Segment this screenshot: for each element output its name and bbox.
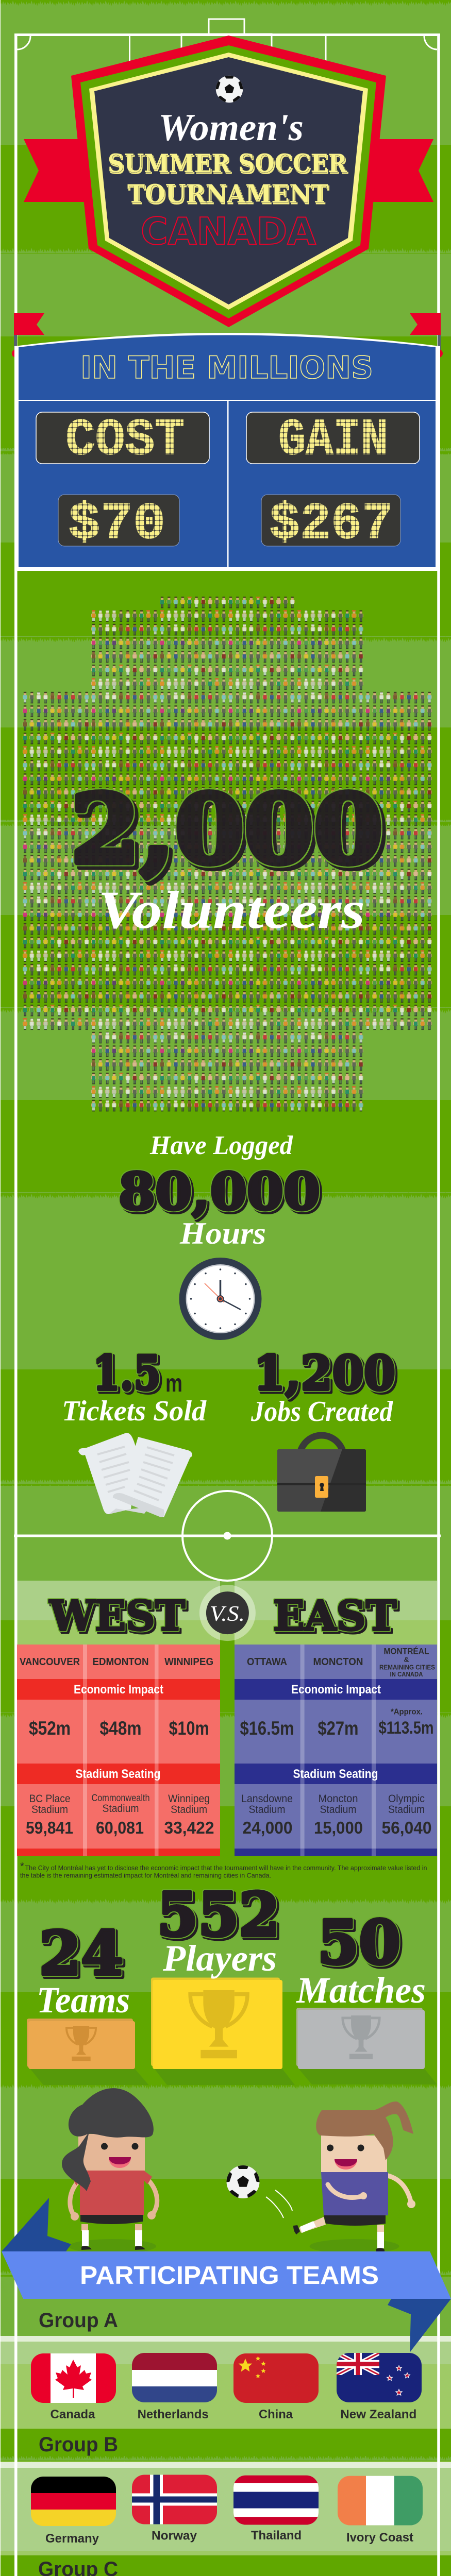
volunteers crowd: [22, 596, 433, 1113]
stat: 2,000: 2,000: [71, 774, 383, 885]
number: 1,200: 1,200: [254, 1345, 395, 1401]
economic values: *Approx.: [391, 1707, 423, 1717]
flag: thailand: [233, 2476, 319, 2525]
banner tails: [2, 2198, 451, 2352]
crowd of people: [22, 596, 433, 1113]
city names: MONCTON: [313, 1656, 363, 1668]
illustration: player two: [293, 2102, 415, 2253]
band: stadium seating: Stadium Seating: [293, 1767, 378, 1781]
label: have logged: Have Logged: [149, 1131, 293, 1160]
city names: IN CANADA: [390, 1670, 423, 1678]
podium: teams: [27, 2019, 135, 2069]
icon: clock: [179, 1258, 262, 1340]
number: 80,000: 80,000: [119, 1162, 320, 1222]
translucent group panels: [0, 2336, 451, 2576]
city names: REMAINING CITIES: [379, 1663, 435, 1671]
seat counts: 56,040: [381, 1818, 432, 1837]
label: jobs created: Jobs Created: [250, 1396, 393, 1428]
city names: WINNIPEG: [164, 1656, 213, 1668]
label: germany: Germany: [45, 2532, 99, 2546]
economic values: [29, 1718, 209, 1739]
number: 1.5m: m: [165, 1370, 182, 1397]
seat counts: [242, 1818, 432, 1837]
illustration: player one: [62, 2088, 157, 2253]
city names: OTTAWA: [247, 1656, 287, 1668]
icon: soccer ball in motion: [224, 2164, 292, 2218]
light band: [17, 1581, 437, 1645]
group a: [31, 2309, 422, 2421]
footnote: [20, 1861, 427, 1879]
flag: germany: [31, 2477, 116, 2526]
flag: canada: [31, 2353, 116, 2403]
title: Women's: Women's: [158, 107, 304, 149]
seat counts: 15,000: [314, 1818, 363, 1837]
stadium names: Stadium: [102, 1803, 139, 1815]
economic values: [240, 1707, 434, 1739]
ribbon behind badge: [24, 139, 433, 202]
seat counts: 60,081: [96, 1818, 144, 1837]
group b: [31, 2433, 423, 2546]
scoreboard: cost value: $70: [68, 496, 165, 554]
economic values: $52m: [29, 1718, 71, 1739]
panel: west vs east heading: [17, 1581, 437, 1645]
heading: group a: Group A: [39, 2309, 118, 2332]
stadium names: Olympic: [388, 1793, 425, 1805]
icon: soccer ball: [214, 75, 245, 104]
label: volunteers: Volunteers: [98, 880, 365, 940]
stadium names: [29, 1793, 210, 1816]
label: matches: Matches: [296, 1970, 426, 2011]
economic values: $48m: [100, 1718, 141, 1739]
heading: east: EAST: [273, 1591, 396, 1640]
table: west cities: [17, 1645, 220, 1856]
band: stadium seating: Stadium Seating: [75, 1767, 161, 1781]
label: new zealand: New Zealand: [340, 2408, 416, 2421]
city names: EDMONTON: [93, 1656, 148, 1668]
city names: [20, 1656, 213, 1668]
stat: tickets sold: [62, 1345, 207, 1517]
city names: [247, 1647, 435, 1678]
economic values: $113.5m: [378, 1718, 434, 1738]
corner flags: [12, 313, 443, 358]
header badge: [24, 36, 433, 327]
label: netherlands: Netherlands: [138, 2408, 209, 2421]
title: Canada: CANADA: [141, 210, 316, 253]
flag: china: [233, 2353, 319, 2403]
label: thailand: Thailand: [251, 2529, 302, 2543]
icon: tickets: [78, 1433, 192, 1517]
seat counts: 59,841: [26, 1818, 73, 1837]
label: norway: Norway: [152, 2529, 197, 2543]
stadium names: Moncton: [319, 1793, 358, 1805]
stadium names: BC Place: [29, 1793, 70, 1805]
icon: briefcase: [277, 1435, 366, 1512]
city names: &: [404, 1655, 409, 1664]
seat counts: [26, 1818, 214, 1837]
heading: participating teams: PARTICIPATING TEAMS: [80, 2262, 379, 2290]
stadium names: Stadium: [388, 1804, 425, 1816]
economic values: $27m: [318, 1718, 359, 1739]
footnote: *: [20, 1861, 24, 1872]
heading: in the millions: IN THE MILLIONS: [80, 350, 373, 386]
label: teams: Teams: [37, 1979, 130, 2021]
badge: v.s.: V.S.: [210, 1602, 245, 1626]
stadium names: Stadium: [171, 1804, 207, 1816]
stat: jobs created: [250, 1345, 395, 1512]
stadium names: Stadium: [320, 1804, 357, 1816]
footnote: the table is the remaining estimated impact for Montréal and remaining cities in Canada.: [20, 1872, 271, 1879]
label: china: China: [259, 2408, 293, 2421]
heading: west: WEST: [49, 1591, 185, 1640]
label: hours: Hours: [179, 1216, 266, 1250]
number: 552: 552: [157, 1880, 280, 1950]
title: Summer Soccer: SUMMER SOCCER: [108, 148, 347, 178]
number: 24: 24: [39, 1919, 123, 1989]
label: players: Players: [162, 1938, 277, 1979]
stadium names: Winnipeg: [168, 1793, 210, 1805]
number: 1.5m: 1.5: [93, 1345, 161, 1401]
stadium names: [241, 1793, 425, 1816]
heading: group b: Group B: [39, 2433, 118, 2456]
scoreboard: gain: GAIN: [278, 412, 388, 470]
stadium names: Stadium: [248, 1804, 286, 1816]
title: Tournament: TOURNAMENT: [127, 179, 328, 209]
label: tickets sold: Tickets Sold: [62, 1395, 207, 1427]
scoreboard: gain value: $267: [269, 496, 393, 554]
panel: in the millions: [14, 333, 440, 571]
badge: v.s.: [199, 1585, 256, 1641]
flag: ivory coast: [338, 2476, 423, 2526]
stadium names: Commonwealth: [92, 1793, 149, 1804]
podium: players: [151, 1977, 282, 2069]
podium: matches: [296, 2008, 425, 2069]
flag: new zealand: [337, 2353, 422, 2402]
flag: netherlands: [132, 2353, 217, 2402]
podium stats: [27, 1880, 437, 2085]
number: 50: 50: [318, 1908, 400, 1978]
seat counts: 24,000: [242, 1818, 293, 1837]
band: economic impact: Economic Impact: [74, 1683, 163, 1697]
label: canada: Canada: [51, 2408, 95, 2421]
label: ivory coast: Ivory Coast: [346, 2531, 413, 2545]
city names: VANCOUVER: [20, 1656, 80, 1668]
economic values: $10m: [169, 1718, 209, 1739]
shield layers: [71, 36, 386, 327]
table: east cities: [235, 1645, 437, 1856]
band: economic impact: Economic Impact: [291, 1683, 381, 1697]
stadium names: Stadium: [31, 1804, 68, 1816]
stadium names: Lansdowne: [241, 1793, 293, 1805]
banner: participating teams: [2, 2198, 451, 2352]
seat counts: 33,422: [164, 1818, 214, 1837]
city names: MONTRÉAL: [383, 1647, 429, 1656]
flag: norway: [132, 2475, 217, 2524]
stat: hours logged: [119, 1131, 320, 1340]
podium shadows: [30, 2069, 437, 2085]
footnote: The City of Montréal has yet to disclose the economic impact that the tournament will have in the community. The approximate value listed in: [25, 1865, 427, 1872]
scoreboard: cost: COST: [65, 412, 185, 470]
economic values: $16.5m: [240, 1718, 294, 1739]
